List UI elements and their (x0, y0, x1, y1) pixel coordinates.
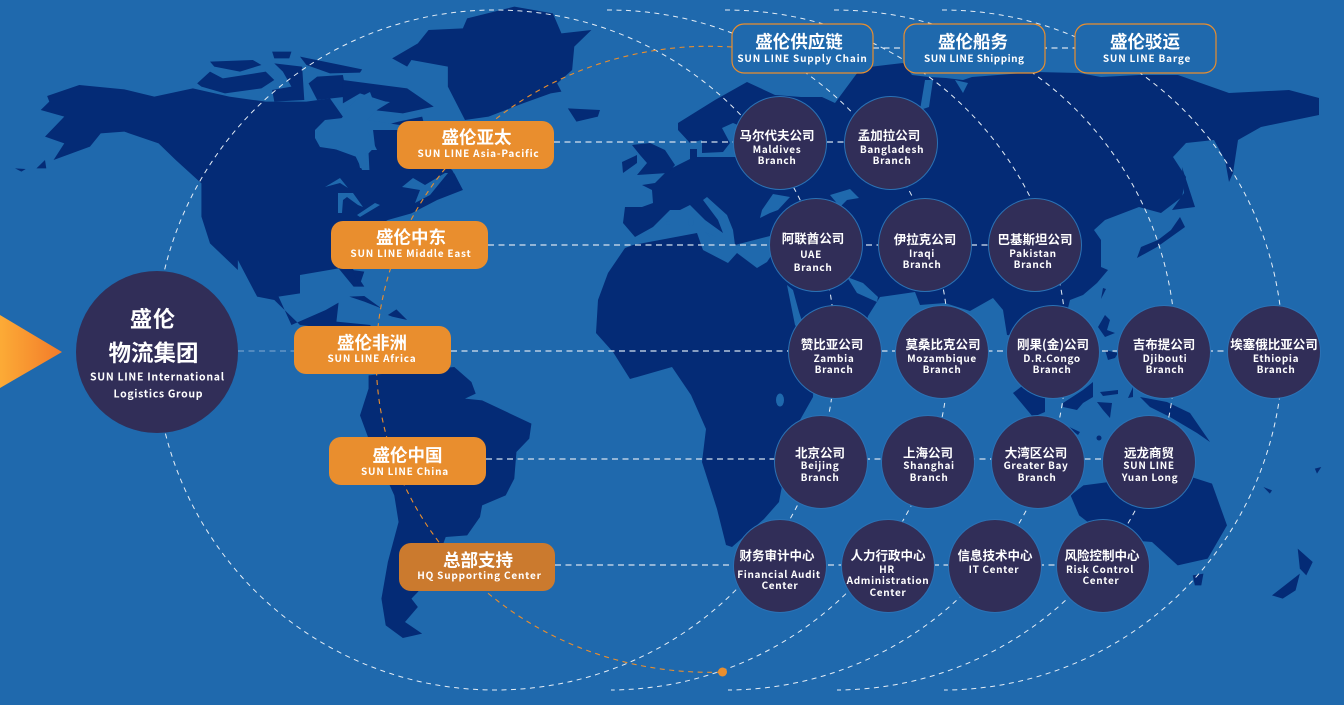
node: D.R. Congo: 刚果(金)公司 (1017, 334, 1089, 353)
box: China: SUN LINE China (361, 463, 449, 478)
box: Supply Chain: 盛伦供应链 (755, 29, 843, 54)
node: Risk Control: Center (1083, 572, 1119, 587)
node: HR Administration: Center (870, 584, 906, 599)
node: Djibouti: 吉布提公司 (1133, 334, 1195, 353)
node: Mozambique: 莫桑比克公司 (905, 334, 981, 353)
map: North America and Greenland (15, 7, 600, 330)
box: Shipping: 盛伦船务 (938, 29, 1008, 54)
box: China (329, 437, 486, 485)
node: Maldives: Maldives (753, 141, 801, 156)
node: HR Administration: HR (879, 561, 895, 576)
node: Yuan Long (1102, 416, 1196, 508)
group circle: 物流集团 (108, 336, 199, 368)
node: Ethiopia: Branch (1257, 361, 1295, 376)
node: Yuan Long: 远龙商贸 (1124, 442, 1174, 462)
node: Iraqi: 伊拉克公司 (894, 229, 956, 248)
node: Bangladesh: Branch (873, 152, 911, 167)
node: UAE: Branch (794, 259, 832, 274)
node: HR Administration (842, 520, 934, 612)
node: Maldives (734, 96, 826, 190)
orange dashed route arc (376, 46, 732, 672)
node: Bangladesh: Bangladesh (860, 141, 924, 156)
box: China: 盛伦中国 (372, 442, 442, 468)
box: HQ support: HQ Supporting Center (417, 567, 542, 582)
node: Iraqi: Iraqi (909, 245, 935, 260)
box: Asia-Pacific (397, 121, 554, 169)
box: Africa: 盛伦非洲 (337, 330, 407, 355)
group circle: SUN LINE International (90, 370, 225, 384)
node: Risk Control: 风险控制中心 (1064, 545, 1140, 564)
box: Asia-Pacific: SUN LINE Asia-Pacific (418, 145, 539, 160)
node: Ethiopia (1228, 306, 1320, 398)
node: Zambia: 赞比亚公司 (801, 334, 863, 353)
node: D.R. Congo (1006, 306, 1100, 398)
node: Iraqi: Branch (903, 256, 941, 271)
box: Barge: 盛伦驳运 (1110, 29, 1180, 54)
node: Bangladesh (844, 96, 938, 190)
box: Supply Chain: SUN LINE Supply Chain (737, 50, 868, 65)
node: UAE: 阿联酋公司 (782, 228, 844, 247)
group circle (76, 271, 238, 433)
node: Iraqi (878, 198, 972, 292)
node: Pakistan: Pakistan (1009, 245, 1057, 260)
box: Shipping (904, 24, 1045, 73)
node: Bangladesh: 孟加拉公司 (858, 125, 920, 144)
node: Greater Bay (992, 416, 1084, 508)
node: Yuan Long: SUN LINE (1123, 457, 1175, 472)
node: Greater Bay: 大湾区公司 (1005, 442, 1067, 462)
node: Shanghai (882, 416, 974, 508)
node: UAE (770, 198, 862, 292)
node: Shanghai: 上海公司 (903, 442, 953, 462)
map: Eurasia and Africa (596, 63, 1319, 547)
node: Ethiopia: 埃塞俄比亚公司 (1230, 334, 1318, 353)
node: Risk Control (1056, 520, 1150, 612)
node: IT Center: 信息技术中心 (957, 545, 1033, 564)
box: Barge: SUN LINE Barge (1103, 50, 1191, 65)
map: South America (360, 367, 531, 638)
node: Financial Audit: Center (762, 577, 798, 592)
node: Zambia: Branch (815, 361, 853, 376)
node: Pakistan (988, 198, 1082, 292)
group circle: 盛伦 (130, 302, 176, 334)
node: Maldives: Branch (758, 152, 796, 167)
box: Middle East: 盛伦中东 (376, 224, 446, 250)
node: Djibouti (1118, 306, 1210, 398)
node: Beijing: 北京公司 (795, 442, 845, 462)
group circle: Logistics Group (114, 386, 203, 402)
box: Shipping: SUN LINE Shipping (924, 50, 1024, 65)
node: Pakistan: 巴基斯坦公司 (997, 229, 1073, 248)
node: Mozambique (896, 306, 988, 398)
node: Ethiopia: Ethiopia (1253, 350, 1299, 365)
box: Africa: SUN LINE Africa (328, 350, 416, 365)
node: IT Center (948, 520, 1042, 612)
map: Australia and New Zealand (1071, 467, 1321, 599)
node: D.R. Congo: Branch (1033, 361, 1071, 376)
node: Shanghai: Shanghai (903, 457, 955, 472)
node: Pakistan: Branch (1014, 256, 1052, 271)
arrow (0, 315, 62, 388)
node: Mozambique: Mozambique (907, 350, 977, 365)
horizontal dashed connector lines (238, 48, 1274, 565)
node: Maldives: 马尔代夫公司 (739, 125, 815, 144)
box: Middle East: SUN LINE Middle East (350, 245, 472, 260)
node: Djibouti: Djibouti (1143, 350, 1187, 365)
box: Middle East (331, 221, 488, 269)
node: Risk Control: Risk Control (1066, 561, 1134, 576)
orange route end dot (718, 668, 727, 676)
box: Barge (1075, 24, 1216, 73)
node: Zambia (788, 306, 882, 398)
node: Shanghai: Branch (910, 469, 948, 484)
box: HQ support: 总部支持 (443, 548, 513, 572)
box: HQ support (399, 543, 555, 591)
node: Zambia: Zambia (814, 350, 854, 365)
node: HR Administration: Administration (846, 572, 929, 587)
node: Greater Bay: Branch (1018, 469, 1056, 484)
node: Beijing: Branch (801, 469, 839, 484)
node: Djibouti: Branch (1146, 361, 1184, 376)
node: D.R. Congo: D.R.Congo (1023, 350, 1081, 365)
node: UAE: UAE (800, 246, 822, 261)
box: Supply Chain (732, 24, 873, 73)
node: Financial Audit (734, 520, 826, 612)
node: Yuan Long: Yuan Long (1121, 469, 1178, 484)
box: Africa (294, 326, 451, 374)
map: Southeast Asia islands (1013, 288, 1210, 442)
node: HR Administration: 人力行政中心 (850, 545, 926, 564)
node: Beijing: Beijing (801, 457, 839, 472)
node: Beijing (774, 416, 868, 508)
box: Asia-Pacific: 盛伦亚太 (442, 124, 512, 150)
node: Greater Bay: Greater Bay (1004, 457, 1068, 472)
node: Mozambique: Branch (923, 361, 961, 376)
node: IT Center: IT Center (969, 561, 1019, 576)
node: Financial Audit: 财务审计中心 (739, 545, 815, 564)
node: Financial Audit: Financial Audit (737, 566, 821, 581)
map: Hudson Bay, Great Lakes and St Lawrence (315, 92, 448, 217)
